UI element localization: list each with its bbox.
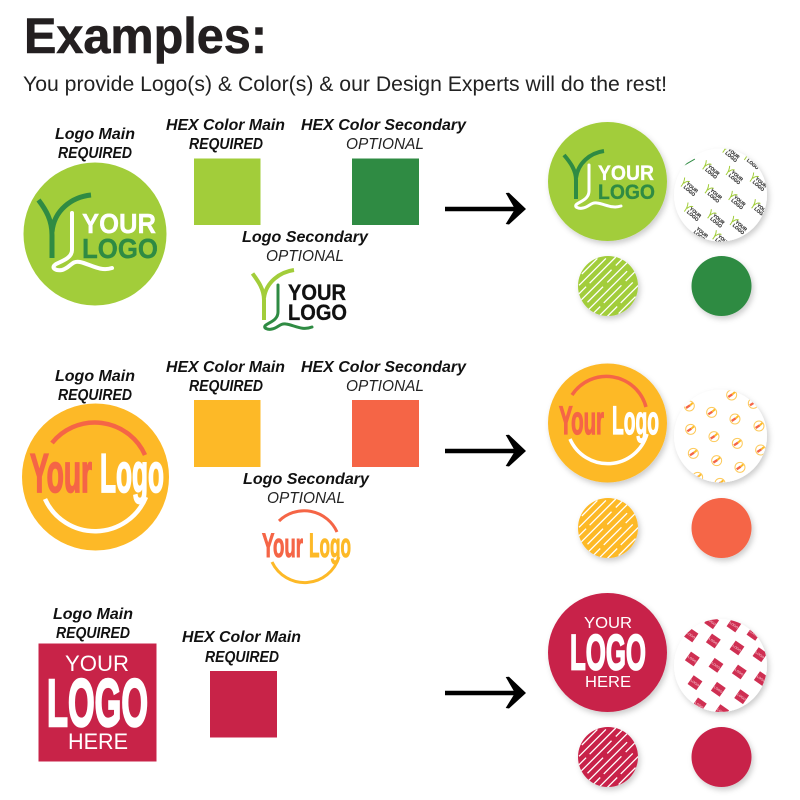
main logo square: LOGO	[47, 666, 148, 741]
label: logo main: REQUIRED	[56, 625, 130, 642]
label: hex secondary: OPTIONAL	[346, 378, 424, 395]
main logo circle: LOGO	[82, 233, 158, 264]
subtitle: You provide Logo(s) & Color(s) & our Design Experts will do the rest!	[23, 73, 667, 96]
result: large sticker	[548, 364, 667, 482]
swatch main	[194, 400, 260, 467]
result: pattern sticker: LOGO	[732, 223, 746, 236]
label: hex main: REQUIRED	[189, 378, 263, 395]
main logo square	[38, 644, 156, 762]
main logo circle: YOUR	[82, 208, 156, 239]
main logo square: YOUR	[65, 651, 129, 676]
label: hex secondary: OPTIONAL	[346, 136, 424, 153]
main logo square: HERE	[68, 729, 128, 754]
main logo circle: Your	[30, 442, 92, 504]
result: pattern sticker: LOGO	[709, 216, 723, 229]
main logo circle	[24, 162, 166, 306]
label: hex main: HEX Color Main	[166, 117, 285, 134]
label: logo main: REQUIRED	[58, 387, 132, 404]
result: pattern sticker: LOGO	[736, 692, 747, 702]
result: pattern sticker: LOGO	[687, 655, 698, 664]
label: logo main	[55, 368, 135, 404]
result: pattern sticker: YOUR	[734, 220, 748, 232]
result: pattern sticker: LOGO	[734, 668, 745, 677]
result: solid sticker	[692, 498, 752, 558]
result: pattern sticker: LOGO	[704, 167, 718, 180]
label: logo main	[55, 126, 135, 162]
label: logo secondary: Logo Secondary	[243, 471, 370, 488]
result: large sticker: YOUR	[584, 615, 632, 632]
result: large sticker	[548, 593, 667, 712]
secondary logo: Your	[262, 527, 303, 565]
result: pattern sticker: LOGO	[729, 621, 739, 630]
result: pattern sticker: LOGO	[707, 191, 721, 204]
label: hex main: HEX Color Main	[182, 629, 301, 646]
result: pattern sticker: LOGO	[749, 629, 759, 638]
label: hex secondary: HEX Color Secondary	[301, 359, 467, 376]
result: pattern sticker: YOUR	[689, 206, 703, 219]
label: hex secondary	[301, 117, 467, 153]
result: pattern sticker: LOGO	[730, 198, 744, 211]
label: logo secondary	[242, 229, 369, 265]
result: pattern sticker: YOUR	[756, 203, 770, 216]
result: pattern sticker: LOGO	[708, 637, 719, 646]
result: large sticker: Your	[559, 399, 604, 443]
result: pattern sticker: YOUR	[733, 195, 747, 207]
result: striped sticker	[578, 256, 642, 322]
result: pattern sticker: LOGO	[756, 674, 767, 684]
secondary logo: LOGO	[288, 300, 347, 325]
result: pattern sticker: YOUR	[727, 147, 741, 160]
result: pattern sticker: LOGO	[713, 685, 724, 694]
arrow	[445, 193, 526, 224]
label: logo main: Logo Main	[53, 606, 133, 623]
label: hex secondary: HEX Color Secondary	[301, 117, 467, 134]
result: solid sticker	[692, 256, 752, 316]
label: hex main: REQUIRED	[205, 649, 279, 666]
label: hex main	[182, 629, 301, 666]
result: pattern sticker: LOGO	[728, 173, 742, 186]
label: hex main: REQUIRED	[189, 136, 263, 153]
result: pattern sticker: LOGO	[732, 644, 742, 653]
result: pattern sticker: LOGO	[752, 180, 766, 192]
result: pattern sticker: YOUR	[709, 188, 723, 201]
result: pattern sticker: LOGO	[694, 701, 705, 710]
result: pattern sticker: LOGO	[686, 210, 700, 222]
label: logo secondary	[243, 471, 370, 507]
label: hex secondary	[301, 359, 467, 395]
result: pattern sticker: YOUR	[749, 155, 763, 167]
main logo circle	[22, 404, 169, 550]
swatch secondary	[352, 158, 419, 225]
result: pattern sticker	[674, 390, 767, 488]
result: large sticker	[548, 122, 667, 241]
label: hex main	[166, 117, 285, 153]
result: large sticker: LOGO	[598, 180, 655, 204]
result: pattern sticker: LOGO	[683, 185, 697, 197]
result: pattern sticker: YOUR	[754, 176, 768, 189]
result: pattern sticker: LOGO	[746, 158, 760, 171]
secondary logo	[262, 511, 351, 583]
main logo circle: Logo	[100, 442, 164, 504]
result: pattern sticker: LOGO	[755, 650, 765, 660]
arrow	[445, 435, 526, 466]
result: striped sticker	[578, 727, 642, 792]
result: pattern sticker	[674, 614, 769, 719]
result: pattern sticker: LOGO	[690, 678, 700, 688]
label: logo secondary: OPTIONAL	[266, 248, 344, 265]
result: pattern sticker: LOGO	[714, 237, 728, 250]
swatch main	[194, 158, 260, 225]
result: large sticker: YOUR	[598, 161, 654, 185]
panel: crimson example	[38, 593, 769, 797]
panel: orange example	[22, 359, 767, 583]
result: pattern sticker	[674, 144, 770, 250]
swatch secondary	[352, 400, 419, 467]
result: pattern sticker: YOUR	[730, 170, 744, 182]
result: pattern sticker: LOGO	[753, 206, 767, 219]
label: hex main	[166, 359, 285, 395]
label: logo secondary: Logo Secondary	[242, 229, 369, 246]
label: logo main: Logo Main	[55, 126, 135, 143]
arrow	[445, 677, 526, 708]
result: solid sticker	[692, 727, 752, 787]
result: striped sticker	[578, 498, 642, 564]
label: logo secondary: OPTIONAL	[267, 490, 345, 507]
result: pattern sticker: LOGO	[724, 151, 738, 163]
panel: green example	[24, 117, 770, 329]
result: pattern sticker: YOUR	[707, 164, 721, 177]
title: Examples:	[24, 8, 267, 64]
label: logo main	[53, 606, 133, 642]
result: pattern sticker: YOUR	[695, 226, 709, 239]
swatch main	[210, 671, 277, 738]
result: pattern sticker: YOUR	[685, 181, 699, 194]
result: pattern sticker: LOGO	[716, 707, 727, 717]
result: pattern sticker: LOGO	[706, 617, 717, 627]
label: logo main: REQUIRED	[58, 145, 132, 162]
result: large sticker: Logo	[612, 399, 659, 443]
secondary logo	[252, 270, 347, 329]
result: pattern sticker: LOGO	[693, 230, 707, 242]
secondary logo: Logo	[309, 527, 351, 565]
result: pattern sticker: LOGO	[711, 661, 721, 670]
result: pattern sticker: LOGO	[686, 631, 696, 640]
result: large sticker: HERE	[585, 674, 631, 691]
label: logo main: Logo Main	[55, 368, 135, 385]
label: hex main: HEX Color Main	[166, 359, 285, 376]
result: pattern sticker: YOUR	[717, 234, 731, 247]
result: large sticker: LOGO	[570, 624, 646, 680]
secondary logo: YOUR	[288, 280, 346, 305]
result: pattern sticker: YOUR	[712, 213, 726, 226]
